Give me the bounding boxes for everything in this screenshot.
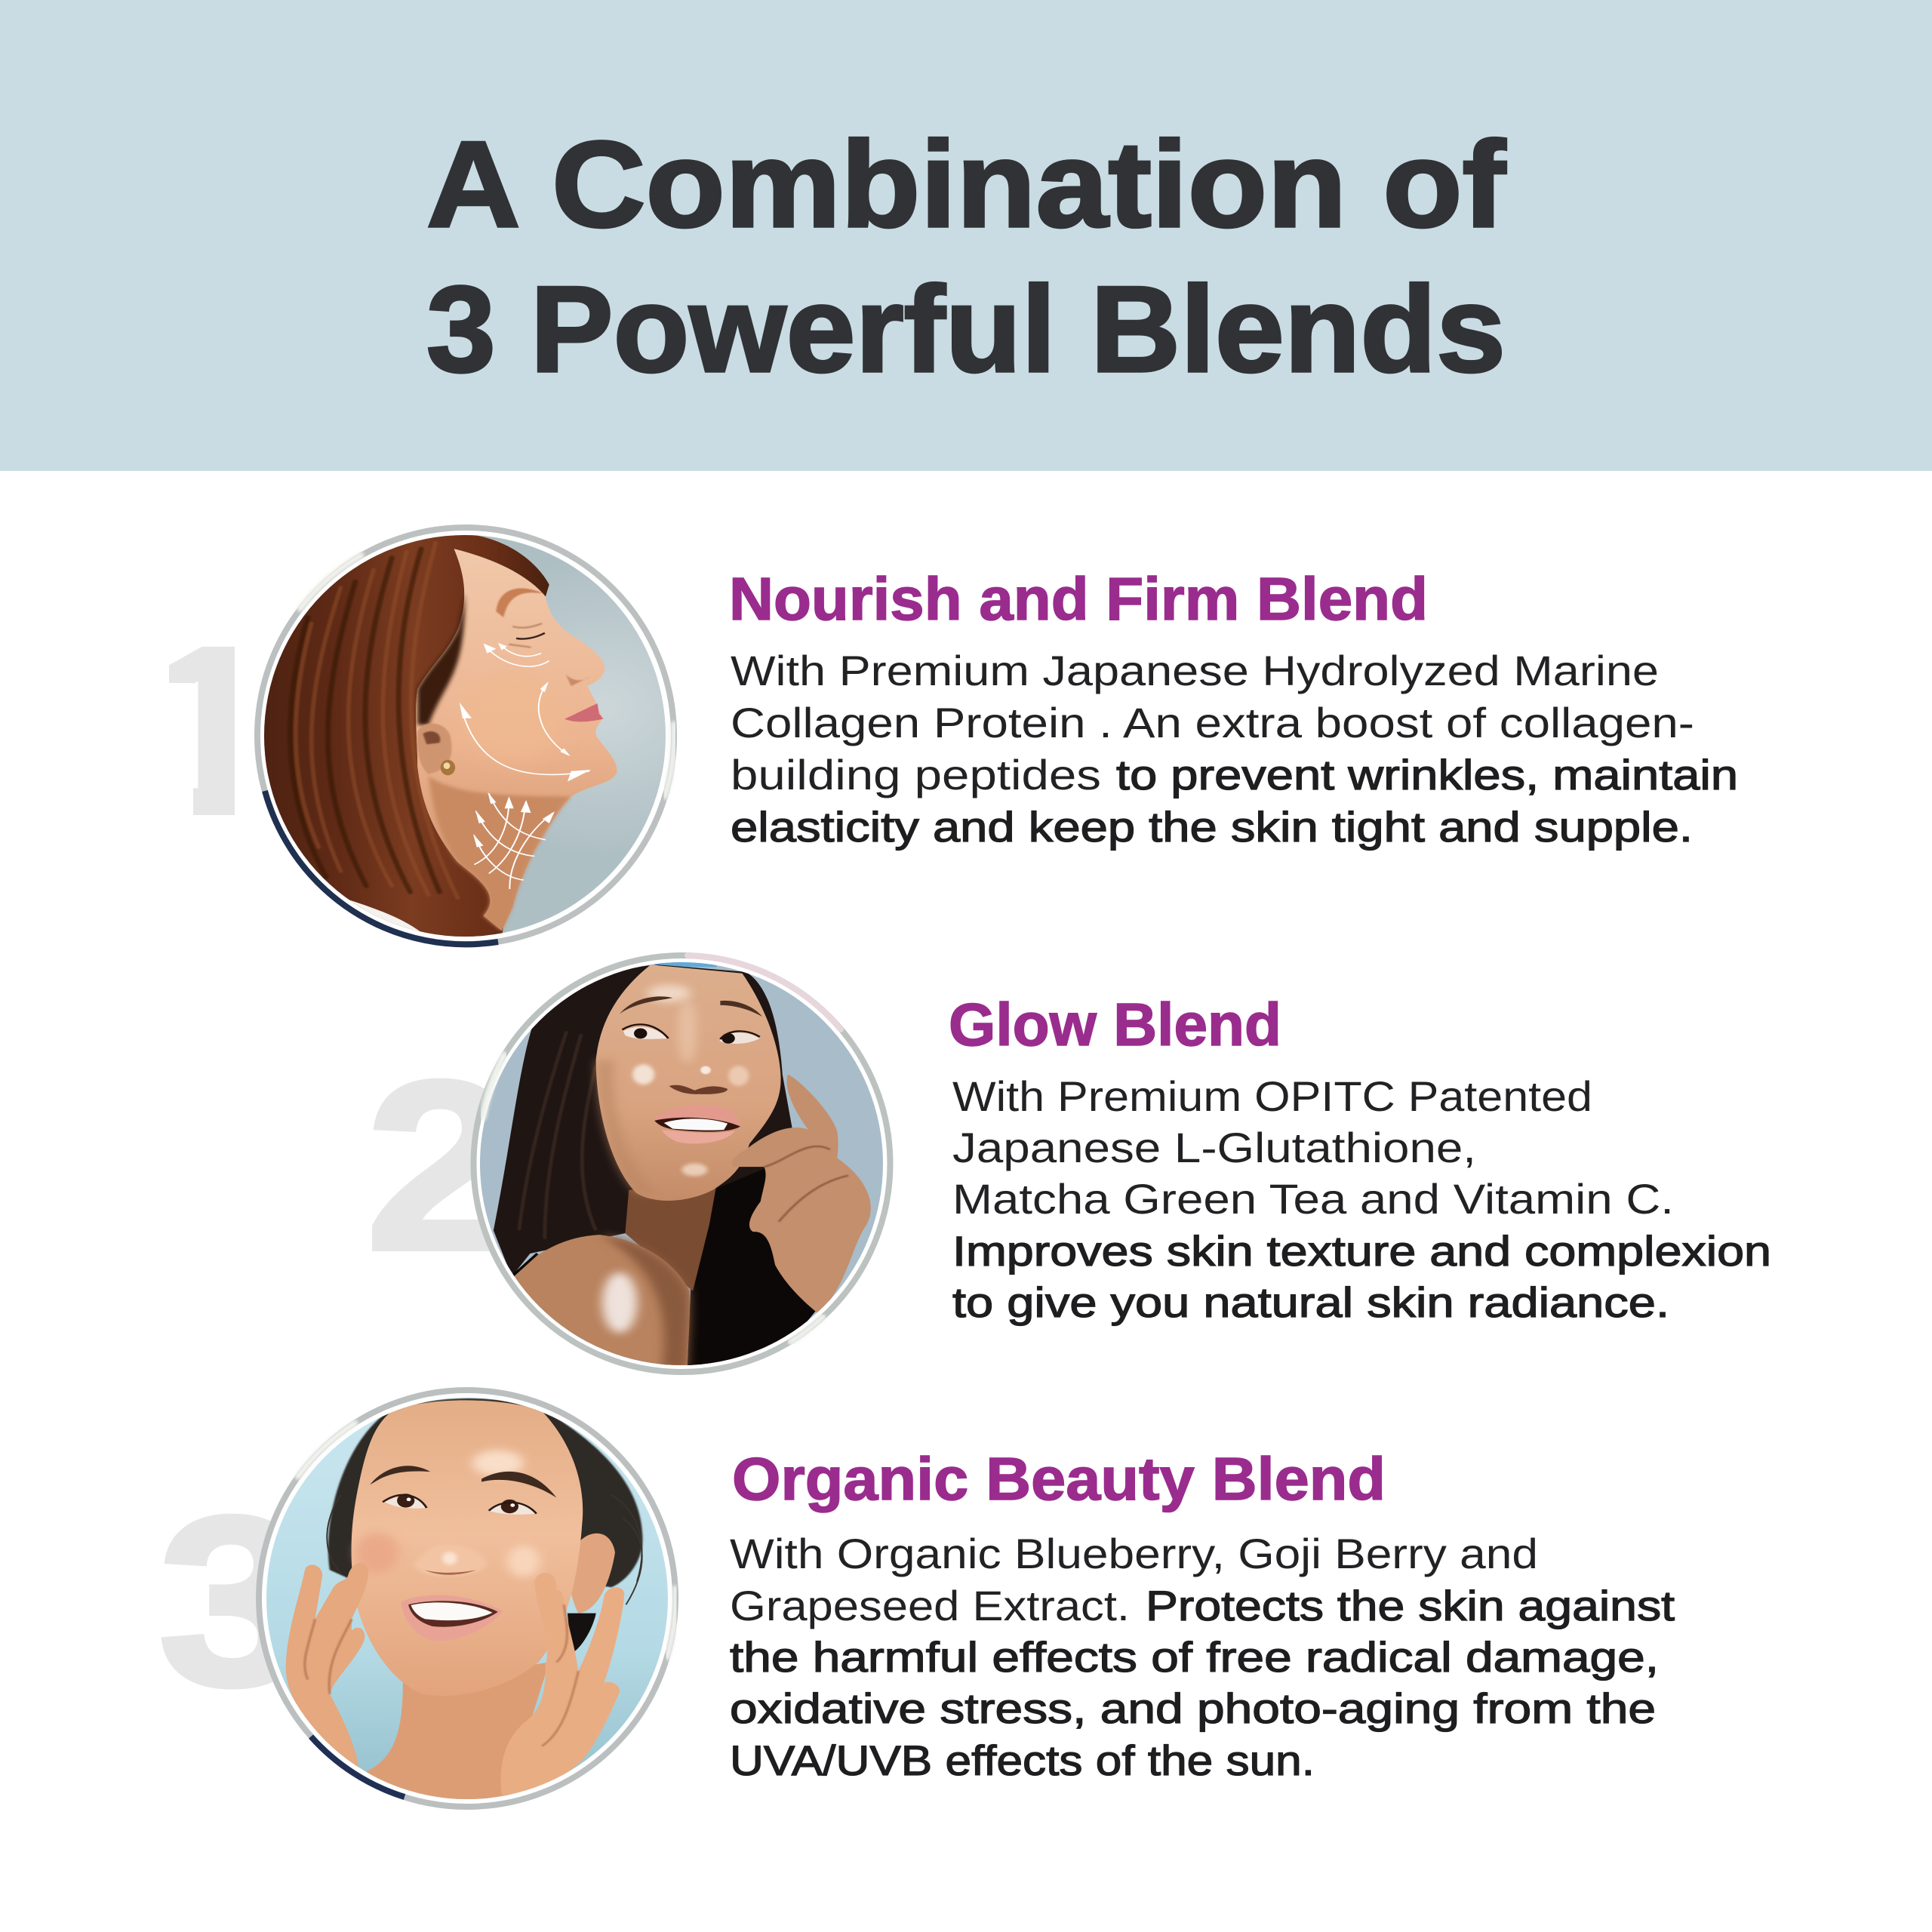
heading: Nourish and Firm Blend [729,565,1428,632]
body text [952,1072,1771,1326]
body text: elasticity and keep the skin tight and supple. [731,803,1693,851]
circular photo: smiling woman with dark hair touching her chin [457,952,914,1380]
ear [417,724,451,774]
heading: Organic Beauty Blend [732,1445,1386,1512]
body text: With Premium OPITC Patented [952,1072,1592,1120]
body text: the harmful effects of free radical damage, [730,1633,1659,1681]
panel: glow blend [365,952,1771,1380]
body text: Japanese L-Glutathione, [952,1124,1476,1171]
number 2: 2 [365,1030,515,1300]
number 1: 1 [136,597,291,867]
body text: With Premium Japanese Hydrolyzed Marine [731,647,1659,694]
body text: oxidative stress, and photo-aging from the [730,1684,1656,1732]
circular photo: woman in profile with lifting arrows [245,516,685,958]
body text: Grapeseed Extract. [730,1582,1130,1629]
body text: Collagen Protein . An extra boost of collagen- [731,699,1694,746]
body text [731,647,1738,851]
ring [257,528,674,944]
panel: nourish and firm blend [136,516,1738,958]
circular photo: smiling woman with hands on her cheeks [245,1387,703,1818]
title: 3 Powerful Blends [426,261,1506,398]
body text: UVA/UVB effects of the sun. [730,1737,1315,1784]
panel: organic beauty blend [158,1387,1675,1818]
ring [474,955,891,1372]
number 3: 3 [158,1466,308,1736]
body text: to prevent wrinkles, maintain [1116,751,1738,798]
body text [730,1530,1675,1784]
body text: to give you natural skin radiance. [952,1278,1669,1326]
header band [0,0,1932,471]
body text: Protects the skin against [1146,1582,1675,1629]
body text: Matcha Green Tea and Vitamin C. [952,1175,1674,1223]
title [426,116,1506,398]
ring [259,1390,675,1807]
body text: building peptides [731,751,1101,798]
body text: With Organic Blueberry, Goji Berry and [730,1530,1538,1577]
mouth [653,1105,741,1143]
title: A Combination of [426,116,1506,253]
heading: Glow Blend [949,991,1281,1058]
body text: Improves skin texture and complexion [952,1227,1771,1275]
